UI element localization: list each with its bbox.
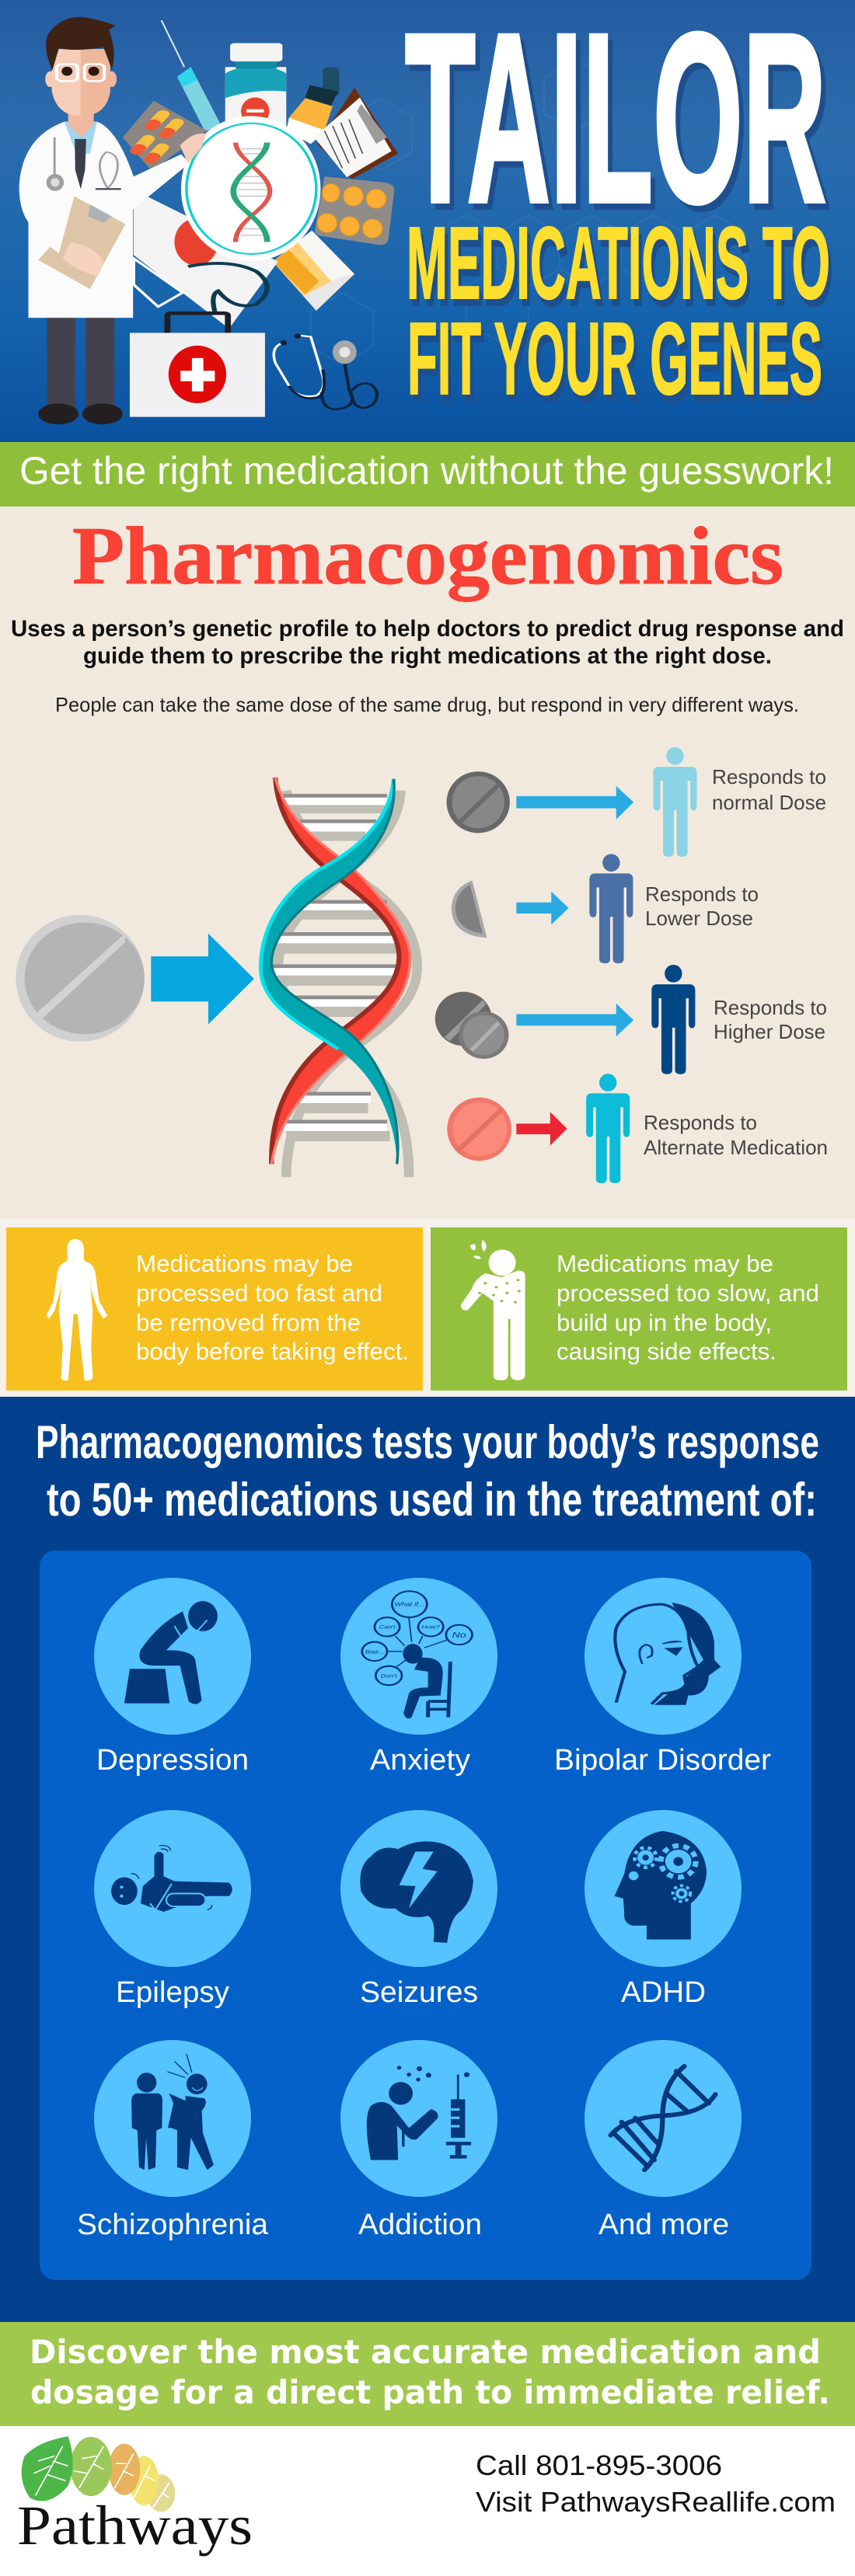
heading: tests your body's response [36,1416,819,1526]
condition: anxiety: Bad... [365,1649,384,1655]
green tagline band [0,442,855,506]
icon: person with rash [461,1240,525,1380]
condition: anxiety: How? [422,1624,440,1630]
label: lower dose [645,882,759,930]
label: alternate medication [644,1111,828,1159]
medical illustration: doctor and supplies [19,17,398,424]
text: too slow: processed too slow, and [557,1279,819,1307]
panel: processed too slow [431,1227,847,1391]
panel: conditions grid [40,1551,811,2280]
icon: blood pressure monitor [134,190,278,329]
footer [0,2426,855,2576]
condition: seizures: Seizures [360,1976,478,2009]
condition: anxiety: Anxiety [370,1744,470,1777]
condition: anxiety: No [452,1631,466,1639]
text: too slow: Medications may be [557,1250,773,1277]
icon: first aid kit [130,313,265,417]
condition: bipolar disorder: Bipolar Disorder [554,1744,771,1777]
panel: pharmacogenomics explanation [0,506,855,1219]
text: too slow: build up in the body, [557,1309,772,1336]
condition: bipolar disorder [554,1578,771,1777]
condition: and more: And more [598,2209,729,2241]
label: alternate medication: Responds to [644,1111,757,1134]
condition: ADHD [585,1810,742,2009]
text: too fast: Medications may be [136,1250,353,1277]
label: higher dose: Higher Dose [714,1020,825,1043]
condition: depression [94,1578,251,1777]
icon: blister pack left [123,101,208,171]
condition: anxiety [340,1578,497,1777]
label: normal dose: normal Dose [712,791,826,814]
label: lower dose: Lower Dose [645,907,753,930]
icon: clipboard [314,88,398,179]
icon: pill bottle [225,44,286,132]
condition: epilepsy: Epilepsy [116,1976,229,2009]
text: too slow: causing side effects. [557,1338,776,1365]
text: too fast: be removed from the [136,1309,361,1336]
condition: anxiety: Can't [379,1624,396,1630]
label: higher dose: Responds to [714,996,827,1019]
condition: epilepsy [94,1810,251,2009]
condition: anxiety: Don't [381,1673,398,1679]
response row: lower dose [452,854,633,963]
call to action band [0,2322,855,2426]
icon: DNA medallion [181,116,320,261]
panels: too fast and too slow [0,1219,855,1397]
label: alternate medication: Alternate Medication [644,1136,828,1159]
condition: and more [585,2040,742,2241]
logo: Pathways [17,2436,253,2557]
condition: schizophrenia: Schizophrenia [77,2209,269,2241]
label: normal dose: Responds to [712,765,826,788]
icon: ointment tube [273,231,354,311]
contact details: Visit PathwaysReallife.com [476,2486,836,2518]
response row: normal dose [447,747,697,857]
arrow: pill to DNA [151,934,254,1025]
condition: ADHD: ADHD [621,1976,706,2009]
green tagline band: Get the right medication without the guesswork! [19,449,834,493]
logo: Pathways: Pathways [17,2494,253,2557]
icon: large pill [16,915,145,1042]
doctor [19,17,206,424]
panel: processed too fast [6,1227,423,1391]
condition: seizures [340,1810,497,2009]
contact details: Call 801-895-3006 [476,2449,722,2481]
response row: alternate medication [447,1074,630,1183]
contact details [476,2449,836,2518]
condition: addiction: Addiction [358,2209,482,2241]
icon: blister pack right [315,176,394,245]
icon: body silhouette [47,1239,107,1380]
text: too fast: processed too fast and [136,1279,382,1307]
header panel [0,0,855,442]
condition: depression: Depression [96,1744,249,1777]
call to action band: Discover the most accurate medication and [30,2333,821,2371]
text: same dose note: People can take the same dose of the same drug, but respond in very different ways. [55,693,799,716]
label: lower dose: Responds to [645,882,759,906]
label: higher dose [714,996,827,1043]
icon: DNA double helix [260,778,417,1177]
icon: dropper bottle [286,67,339,144]
text: too fast: body before taking effect. [136,1338,409,1365]
icon: syringe [162,20,222,131]
section: conditions treated [0,1397,855,2322]
text: definition: Uses a person’s genetic profile to help doctors to predict drug response and [11,616,844,642]
label: normal dose [712,765,826,814]
heading: Pharmacogenomics: Pharmacogenomics [72,510,783,601]
text: too slow [557,1250,819,1365]
condition: anxiety: What if... [394,1601,424,1607]
text: too fast [136,1250,409,1365]
condition: schizophrenia [77,2040,269,2241]
response row: higher dose [435,965,695,1074]
call to action band: dosage for a direct path to immediate relief. [30,2373,830,2411]
icon: stethoscope [274,333,377,409]
text: definition [11,616,844,669]
condition: addiction [340,2040,497,2241]
text: definition: guide them to prescribe the right medications at the right dose. [83,643,772,669]
diagram: pill to DNA [16,747,697,1183]
